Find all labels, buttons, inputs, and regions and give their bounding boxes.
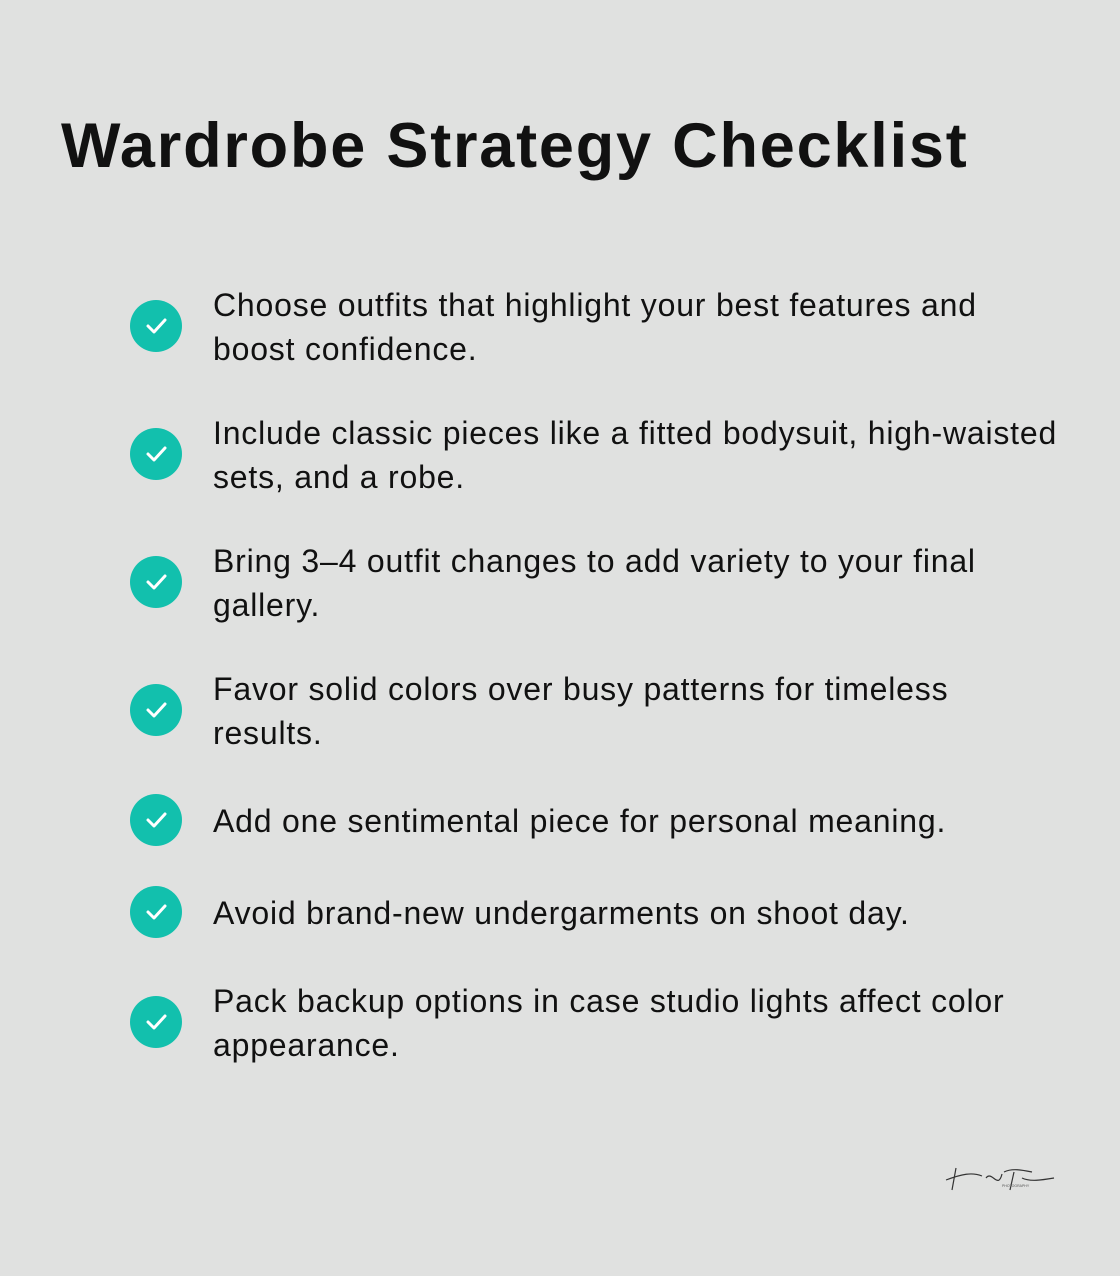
logo signature xyxy=(946,1168,1054,1190)
item 6 xyxy=(130,886,910,938)
text: Avoid brand-new undergarments on shoot day. xyxy=(213,895,910,931)
text: Bring 3–4 outfit changes to add variety to your final xyxy=(213,543,976,579)
icon: check xyxy=(130,428,182,480)
text: Add one sentimental piece for personal meaning. xyxy=(213,803,946,839)
text: Choose outfits that highlight your best features and xyxy=(213,287,977,323)
icon: check xyxy=(130,556,182,608)
text: Favor solid colors over busy patterns for timeless xyxy=(213,671,948,707)
text xyxy=(213,671,948,751)
logo signature: PHOTOGRAPHY xyxy=(1002,1184,1030,1188)
text: Pack backup options in case studio lights affect color xyxy=(213,983,1004,1019)
icon: check xyxy=(130,794,182,846)
text: appearance. xyxy=(213,1027,400,1063)
text: gallery. xyxy=(213,587,320,623)
icon: check xyxy=(130,300,182,352)
item 7 xyxy=(130,983,1004,1063)
text: results. xyxy=(213,715,323,751)
text xyxy=(213,983,1004,1063)
text: boost confidence. xyxy=(213,331,477,367)
item 5 xyxy=(130,794,946,846)
icon: check xyxy=(130,684,182,736)
text: Include classic pieces like a fitted bodysuit, high-waisted xyxy=(213,415,1057,451)
item 4 xyxy=(130,671,948,751)
title: Wardrobe Strategy Checklist xyxy=(61,111,968,181)
text xyxy=(213,543,976,623)
item 1 xyxy=(130,287,977,367)
icon: check xyxy=(130,996,182,1048)
item 3 xyxy=(130,543,976,623)
text xyxy=(213,287,977,367)
text: sets, and a robe. xyxy=(213,459,465,495)
icon: check xyxy=(130,886,182,938)
item 2 xyxy=(130,415,1057,495)
text xyxy=(213,415,1057,495)
